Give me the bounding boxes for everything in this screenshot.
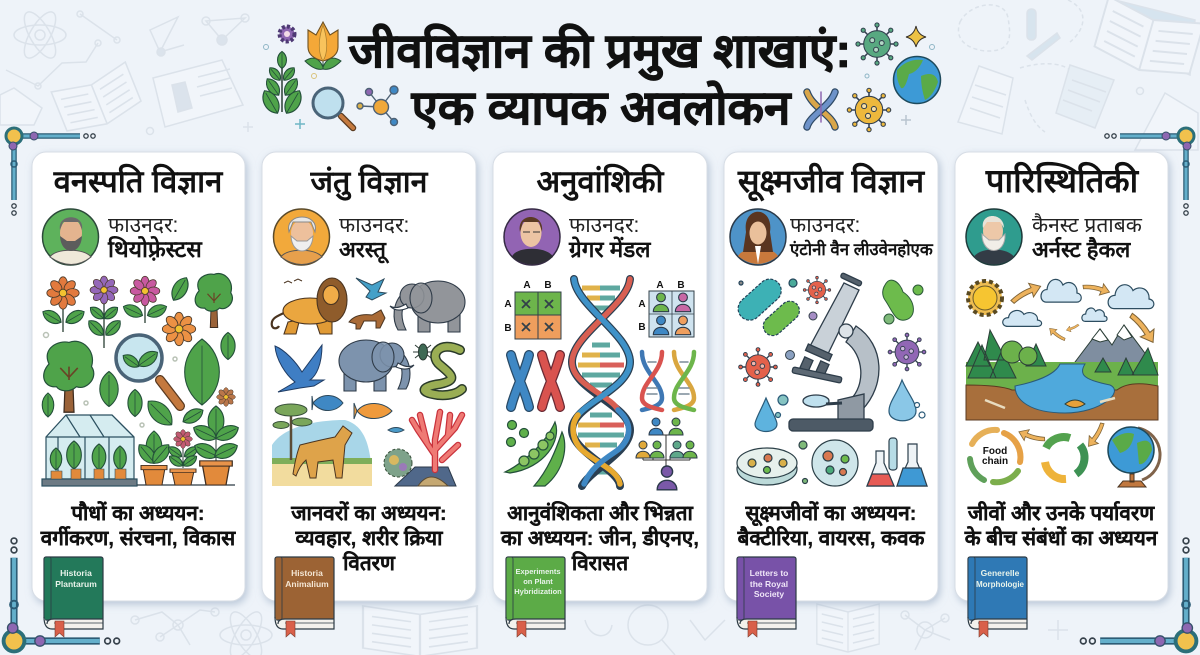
icon: molecule xyxy=(357,86,398,126)
description xyxy=(40,501,236,550)
water drops xyxy=(755,380,925,432)
header icons right xyxy=(807,23,940,132)
illustration: plants xyxy=(40,274,241,486)
book: Historia Plantarum: Plantarum xyxy=(55,579,97,589)
founder label: अरस्तू xyxy=(339,237,390,264)
description xyxy=(290,501,447,575)
flasks xyxy=(867,438,927,486)
illustration: animals xyxy=(272,278,465,486)
bird and small mammal xyxy=(356,278,386,300)
ornament: top-right corner xyxy=(1105,128,1194,215)
heading: वनस्पति विज्ञान xyxy=(53,163,224,199)
icon: tulip xyxy=(305,22,341,69)
bacteria xyxy=(733,274,803,339)
culture dish xyxy=(799,440,858,486)
book: Historia Plantarum xyxy=(44,557,103,637)
book: Generelle Morphologie: Morphologie xyxy=(976,580,1025,589)
book: Letters to the Royal Society: Society xyxy=(754,589,784,599)
book: Letters to the Royal Society: Letters to xyxy=(750,568,788,578)
portrait: Leeuwenhoek xyxy=(730,209,786,265)
petri dish xyxy=(737,448,797,485)
book: Experiments on Plant Hybridization xyxy=(506,557,565,637)
clouds and arrows xyxy=(1041,279,1081,302)
portrait: Haeckel xyxy=(966,209,1022,265)
book: Experiments on Plant Hybridization: Hybridization xyxy=(514,587,562,596)
heading: पारिस्थितिकी xyxy=(985,161,1140,199)
description: जानवरों का अध्ययन: xyxy=(290,501,447,525)
founder label: कैनस्ट प्रताबक xyxy=(1032,213,1143,237)
illustration: ecosystem: chain xyxy=(982,456,1008,467)
description: वितरण xyxy=(342,551,396,575)
heading: सूक्ष्मजीव विज्ञान xyxy=(737,162,925,202)
illustration: genetics: B xyxy=(677,280,685,291)
icon: leafy sprig xyxy=(259,52,305,117)
microscope xyxy=(789,273,879,431)
portrait: Aristotle xyxy=(274,209,330,265)
panel: microbiology xyxy=(724,152,938,637)
description: पौधों का अध्ययन: xyxy=(70,501,205,525)
header icons left xyxy=(259,22,398,129)
panel: zoology xyxy=(262,152,476,637)
book: Experiments on Plant Hybridization: on Plant xyxy=(523,577,553,586)
title: एक व्यापक अवलोकन xyxy=(411,80,792,135)
ornament: bottom-left corner xyxy=(4,538,120,651)
book: Letters to the Royal Society: the Royal xyxy=(750,579,788,589)
heading: अनुवांशिकी xyxy=(536,163,665,201)
book: Historia Plantarum: Historia xyxy=(60,568,92,578)
illustration: genetics: B xyxy=(638,322,646,333)
large DNA helix xyxy=(572,279,630,486)
chromosomes xyxy=(511,355,560,407)
description: बैक्टीरिया, वायरस, कवक xyxy=(737,526,926,550)
pea pods xyxy=(505,420,565,486)
decorative dots xyxy=(264,44,316,129)
description: के बीच संबंधों का अध्ययन xyxy=(964,526,1159,550)
illustration: microbes xyxy=(733,273,927,486)
icon: purple gear xyxy=(280,26,294,42)
description: जीवों और उनके पर्यावरण xyxy=(967,501,1155,525)
sun xyxy=(968,281,1002,315)
book: Letters to the Royal Society xyxy=(737,557,796,637)
description xyxy=(737,501,926,550)
blue-grey elephant xyxy=(339,340,414,391)
fishes xyxy=(312,395,404,432)
founder label: एंटोनी वैन लीउवेनहोएक xyxy=(789,239,934,259)
decorative dots xyxy=(865,44,934,125)
founder label: फाउनदर: xyxy=(339,214,409,237)
panel: botany xyxy=(32,152,245,637)
founder label: फाउनदर: xyxy=(108,214,178,237)
founder label xyxy=(789,214,934,259)
description: विरासत xyxy=(571,551,629,575)
book: Generelle Morphologie xyxy=(968,557,1027,637)
founder label: फाउनदर: xyxy=(790,214,860,237)
food chain ring xyxy=(970,430,1020,482)
icon: chromosome xyxy=(807,92,835,127)
book: Historia Animalium: Animalium xyxy=(285,579,329,589)
illustration: genetics: A xyxy=(656,280,664,291)
icon: magnifier xyxy=(313,88,353,128)
description xyxy=(964,501,1159,550)
icon: yellow virus xyxy=(847,88,891,132)
icon: sparkle xyxy=(906,26,926,47)
description: का अध्ययन: जीन, डीएनए, xyxy=(500,526,699,550)
title xyxy=(348,23,851,135)
founder label xyxy=(339,214,409,264)
illustration: genetics xyxy=(504,279,697,490)
greenhouse xyxy=(42,415,137,486)
founder label xyxy=(107,214,203,262)
punnett people xyxy=(649,291,694,337)
description: व्यवहार, शरीर क्रिया xyxy=(295,526,444,550)
potted plants xyxy=(134,406,241,485)
coral and rocks xyxy=(384,412,462,486)
description xyxy=(500,501,699,575)
description: आनुवंशिकता और भिन्नता xyxy=(507,501,695,526)
panel: genetics xyxy=(493,152,707,637)
founder label xyxy=(1032,213,1143,262)
savanna scene xyxy=(272,404,372,486)
founder label: थियोफ़्रेस्टस xyxy=(107,235,203,262)
illustration: genetics: B xyxy=(504,323,512,334)
illustration: genetics: A xyxy=(523,280,531,291)
icon: green virus xyxy=(856,23,898,65)
illustration: genetics: B xyxy=(544,280,552,291)
title: जीवविज्ञान की प्रमुख शाखाएं: xyxy=(348,23,851,81)
punnett square xyxy=(515,292,561,339)
globe on stand xyxy=(1108,427,1160,487)
small DNA helices xyxy=(642,352,694,410)
magnifier xyxy=(116,335,180,406)
illustration: ecosystem xyxy=(966,276,1160,487)
recycling arrows xyxy=(1045,437,1084,479)
ornament: top-left corner xyxy=(6,128,95,215)
book: Generelle Morphologie: Generelle xyxy=(981,568,1020,578)
portrait: Theophrastus xyxy=(42,209,98,265)
description: वर्गीकरण, संरचना, विकास xyxy=(40,526,236,550)
description: सूक्ष्मजीवों का अध्ययन: xyxy=(744,501,917,527)
heading: जंतु विज्ञान xyxy=(310,164,429,201)
blue bird xyxy=(275,345,324,392)
founder label: अर्नस्ट हैकल xyxy=(1032,236,1131,262)
illustration: genetics: A xyxy=(504,299,512,310)
family tree xyxy=(636,418,697,490)
panel: ecology xyxy=(955,152,1168,637)
lion xyxy=(272,278,347,334)
beetle xyxy=(413,344,433,360)
founder label: फाउनदर: xyxy=(569,214,639,237)
book: Historia Animalium: Historia xyxy=(291,568,323,578)
portrait: Mendel xyxy=(504,209,560,265)
ornament: bottom-right corner xyxy=(1080,538,1196,651)
book: Experiments on Plant Hybridization: Experiments xyxy=(515,567,561,576)
founder label: ग्रेगर मेंडल xyxy=(568,236,651,262)
snake xyxy=(425,347,462,395)
landscape xyxy=(966,325,1158,420)
founder label xyxy=(568,214,651,262)
grey elephant xyxy=(390,281,465,332)
book: Historia Animalium xyxy=(275,557,334,637)
illustration: genetics: A xyxy=(638,299,646,310)
icon: globe xyxy=(894,56,940,104)
illustration: ecosystem: Food xyxy=(983,446,1007,457)
